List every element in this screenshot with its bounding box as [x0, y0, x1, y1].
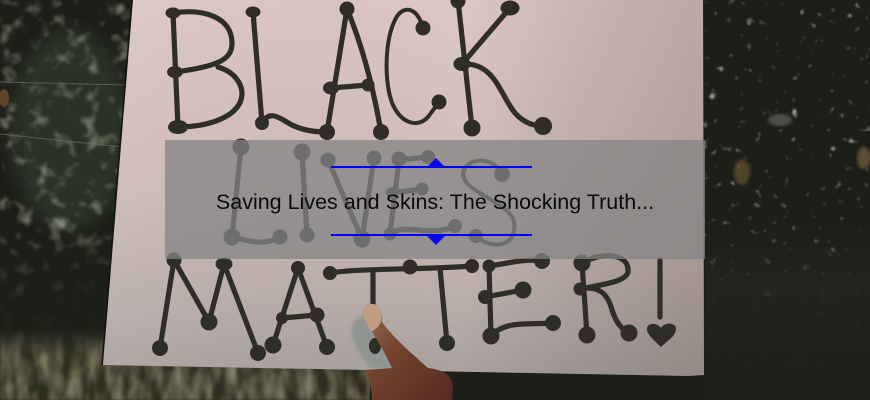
poster board: [102, 0, 704, 376]
wires: [0, 82, 125, 147]
hand and thumb: [363, 304, 453, 400]
sign word: MATTER!: [152, 252, 676, 361]
sign word: BLACK: [166, 0, 552, 140]
headline text: Saving Lives and Skins: The Shocking Truth...: [216, 190, 654, 214]
hidden letter stem end beside thumb: [369, 338, 381, 354]
bottom rule: [331, 234, 532, 236]
thumb shadow on poster: [352, 315, 395, 370]
translucent title banner: [165, 140, 705, 259]
sign word: LIVES: [224, 138, 514, 248]
top triangle marker: [427, 158, 445, 167]
thumb tip highlight: [363, 304, 381, 331]
top rule: [331, 166, 532, 168]
bottom triangle marker: [427, 236, 445, 245]
